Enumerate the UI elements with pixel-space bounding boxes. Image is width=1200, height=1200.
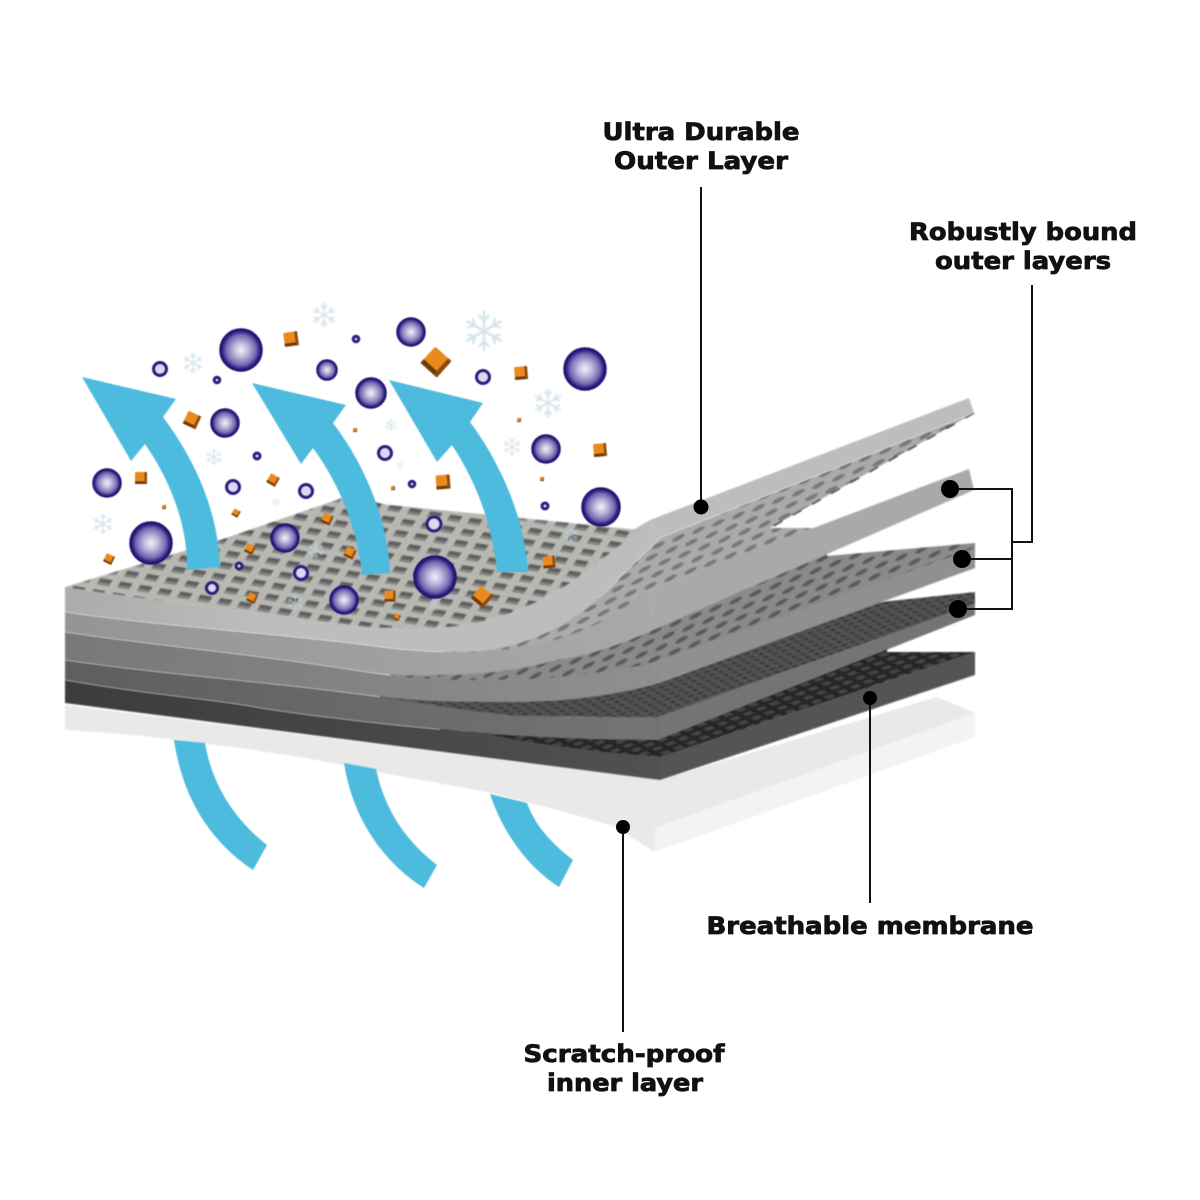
- small ring spheres: [154, 336, 548, 594]
- label: ultra durable outer layer: [602, 118, 800, 175]
- grey layer two: [65, 413, 974, 675]
- label: ultra durable outer layer: Ultra Durable: [602, 118, 800, 146]
- grey layer three: [65, 543, 975, 702]
- label: scratch-proof inner layer: [524, 1040, 725, 1097]
- spheres: [93, 318, 620, 614]
- leader: breathable membrane: [863, 691, 877, 903]
- grey layer four: [65, 590, 975, 740]
- ultra durable outer layer: [65, 398, 974, 652]
- label: robustly bound outer layers: [909, 218, 1137, 275]
- leader bracket: robustly bound outer layers: [941, 285, 1032, 618]
- dark breathable membrane layer: [65, 640, 975, 780]
- orange particles: [103, 331, 607, 621]
- leader: scratch-proof inner layer: [616, 820, 630, 1032]
- outer mesh surface: [65, 497, 640, 628]
- label: scratch-proof inner layer: inner layer: [547, 1069, 703, 1097]
- label: ultra durable outer layer: Outer Layer: [614, 147, 788, 175]
- lower airflow arrows: [174, 740, 573, 888]
- label: breathable membrane: Breathable membrane: [706, 912, 1034, 940]
- snowflakes: [94, 303, 577, 611]
- label: robustly bound outer layers: Robustly bound: [909, 218, 1137, 246]
- label: robustly bound outer layers: outer layers: [935, 247, 1111, 275]
- upper airflow arrows: [82, 377, 528, 575]
- label: scratch-proof inner layer: Scratch-proof: [524, 1040, 725, 1068]
- leader: ultra durable outer layer: [694, 187, 708, 514]
- white inner layer: [65, 697, 975, 852]
